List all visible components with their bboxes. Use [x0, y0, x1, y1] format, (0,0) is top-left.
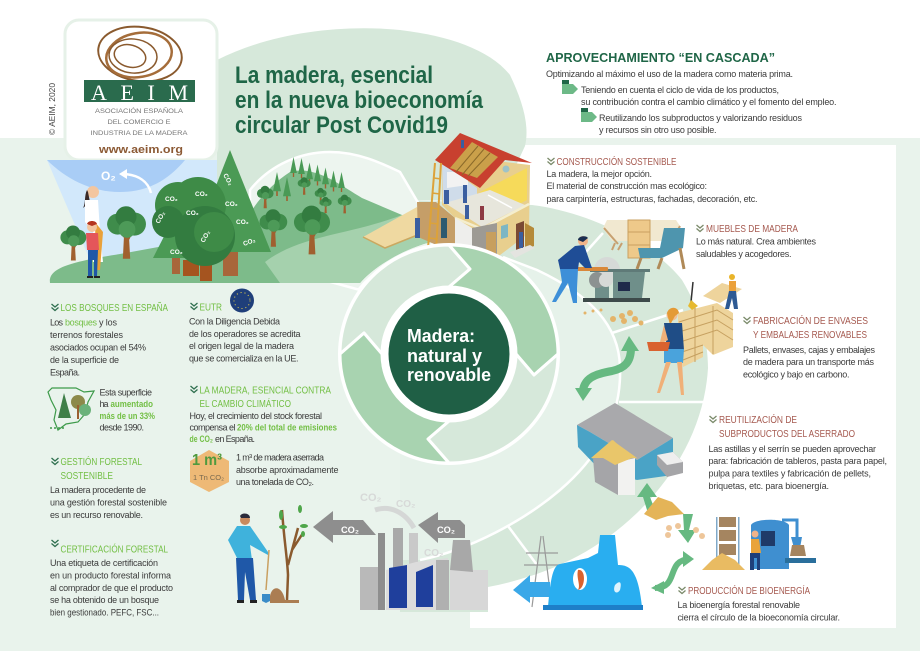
oxygen arrow	[124, 174, 151, 193]
block: certificación forestal: Una etiqueta de certificación	[50, 558, 158, 568]
saw machine	[590, 269, 650, 272]
logo: association name: ASOCIACIÓN ESPAÑOLA	[95, 106, 184, 115]
scene: forest absorbing CO2	[152, 150, 271, 281]
pallet truck	[691, 282, 693, 302]
icon: cascade arrow 2	[581, 108, 597, 122]
block: construcción sostenible: para carpintería, estructuras, fachadas, decoración, etc.	[546, 194, 758, 204]
title: circular Post Covid19	[235, 112, 448, 139]
facade window and door	[501, 224, 508, 239]
annex wall	[417, 202, 455, 253]
yellow wall	[480, 168, 527, 218]
heading: cascada: APROVECHAMIENTO “EN CASCADA”	[546, 50, 775, 65]
text: 1 m3 absorbs: una tonelada de CO₂.	[236, 477, 314, 487]
scene: hills	[50, 152, 440, 290]
illustration: bioenergy plant	[513, 535, 643, 610]
block: cambio climático: compensa el	[190, 422, 236, 432]
ladder	[428, 163, 441, 252]
block: los bosques en España: y los	[99, 318, 118, 328]
illustration: chipping mill	[577, 403, 683, 495]
arrow: CO2 right: CO₂	[437, 525, 455, 536]
oxygen label: O₂	[101, 169, 116, 183]
illustration: factory	[360, 492, 488, 610]
upper room back wall	[442, 163, 477, 207]
block: certificación forestal: CERTIFICACIÓN FORESTAL	[60, 542, 168, 556]
CO2 labels on trees: CO₂	[170, 249, 183, 256]
arrow: bioenergy exchange	[651, 551, 694, 594]
block: gestión forestal sostenible: GESTIÓN FORESTAL	[60, 455, 142, 468]
block: aprovechamiento en cascada	[546, 50, 836, 135]
block: los bosques en España: de la superficie de	[50, 355, 119, 365]
workers	[415, 218, 420, 238]
crate	[647, 342, 670, 351]
worker	[578, 236, 588, 246]
block: producción de bioenergía: cierra el círculo de la bioeconomía circular.	[678, 612, 840, 622]
illustration: pallets and woman	[647, 274, 742, 395]
wood chip pile	[644, 497, 684, 520]
segment: left	[340, 333, 449, 463]
icon: 1 m3 wood cube	[190, 450, 229, 492]
block: reutilización de subproductos: para: fabricación de tableros, pasta para papel,	[708, 456, 887, 466]
CO2 labels on trees: CO₂	[155, 210, 167, 225]
text: esta superficie	[100, 388, 155, 432]
CO2 labels on trees: CO₂	[221, 172, 234, 187]
logo: association name: DEL COMERCIO E	[108, 119, 171, 126]
illustration: biomass factory	[702, 517, 816, 570]
illustration: sawmill worker	[552, 236, 650, 326]
scene: trees beside family	[60, 206, 146, 260]
block: cambio climático: EL CAMBIO CLIMÁTICO	[200, 397, 291, 410]
block: cambio climático: en España.	[215, 434, 255, 444]
arrow: chips up to mill and down to bioenergy	[637, 483, 705, 543]
block: los bosques en España	[50, 301, 168, 378]
logo panel	[65, 20, 217, 160]
block: envases y embalajes	[743, 314, 876, 380]
family figures	[83, 186, 103, 278]
block: los bosques en España: España.	[50, 368, 80, 378]
illustration: man planting tree	[228, 505, 308, 603]
logo: association name: INDUSTRIA DE LA MADERA	[90, 130, 188, 137]
panel: white right panel	[470, 145, 896, 628]
block: certificación forestal: al comprador de que el producto	[50, 583, 173, 593]
block: los bosques en España: terrenos forestales	[50, 330, 124, 340]
scene: pines and small trees on hill	[257, 157, 352, 254]
blue tanks	[548, 535, 642, 607]
man	[240, 515, 250, 525]
text: 1 m3 absorbs	[236, 452, 338, 487]
floor edge	[455, 204, 529, 229]
CO2 labels on trees: CO₂	[225, 201, 238, 208]
red roof	[435, 133, 532, 188]
lower rooms	[455, 218, 472, 255]
block: aprovechamiento en cascada: Optimizando al máximo el uso de la madera como materia prima.	[546, 69, 793, 79]
text: 1 m3 absorbs: absorbe aproximadamente	[236, 465, 338, 475]
block: reutilización de subproductos: pulpa para textiles y fabricación de pellets,	[708, 468, 871, 478]
arrow: S-curve from mill to packaging	[575, 336, 639, 401]
block: cambio climático: LA MADERA, ESENCIAL CONTRA	[200, 386, 331, 396]
CO2 labels on trees: CO₂	[236, 219, 249, 226]
floor	[445, 190, 525, 227]
outer ring: circular economy stages	[400, 200, 708, 612]
block: certificación forestal: se ha obtenido de un bosque	[50, 595, 159, 605]
central circular arrows	[338, 243, 560, 465]
block: gestión forestal sostenible: La madera procedente de	[50, 485, 146, 495]
block: muebles de madera: Lo más natural. Crea ambientes	[696, 236, 816, 246]
pylon	[524, 536, 560, 607]
text: esta superficie: ha	[100, 399, 108, 409]
title: La madera, esencial	[235, 62, 433, 89]
block: reutilización de subproductos: Las astillas y el serrín se pueden aprovechar	[708, 444, 876, 454]
block: certificación forestal	[50, 540, 173, 618]
icon: cascade arrow 1	[562, 80, 578, 94]
block: cambio climático: Hoy, el crecimiento del stock forestal	[190, 411, 322, 421]
arrow: CO2 right	[418, 512, 465, 543]
block: envases y embalajes: de madera para un transporte más	[743, 357, 874, 367]
central circle: Madera natural y renovable: Madera:	[407, 326, 475, 346]
icon: 1 m3 wood cube: 1 m³	[192, 452, 222, 469]
block: producción de bioenergía	[678, 584, 840, 622]
segment: top left	[340, 245, 470, 354]
block: reutilización de subproductos: REUTILIZACIÓN DE	[719, 413, 797, 426]
energy arrow	[513, 575, 550, 603]
pallets	[678, 303, 733, 367]
illustration: factory: CO₂	[396, 499, 415, 510]
block: construcción sostenible: La madera, la mejor opción.	[546, 169, 652, 179]
block: aprovechamiento en cascada: su contribución contra el cambio climático y el fomento del empleo.	[581, 97, 836, 107]
block: envases y embalajes: ecológico y bajo en carbono.	[743, 370, 850, 380]
block: EUTR: el origen legal de la madera	[189, 341, 294, 351]
house illustration	[363, 133, 535, 268]
block: gestión forestal sostenible: una gestión forestal sostenible	[50, 498, 167, 508]
block: construcción sostenible	[546, 155, 758, 204]
block: aprovechamiento en cascada: Teniendo en cuenta el ciclo de vida de los productos,	[581, 85, 779, 95]
block: EUTR: EUTR	[200, 302, 222, 314]
round tree	[155, 182, 201, 228]
text: esta superficie: Esta superficie	[100, 388, 152, 398]
block: reutilización de subproductos	[708, 413, 887, 491]
shovel	[266, 550, 269, 590]
block: reutilización de subproductos: SUBPRODUCTOS DEL ASERRADO	[719, 429, 855, 440]
block: envases y embalajes: Pallets, envases, cajas y embalajes	[743, 345, 876, 355]
block: cambio climático	[190, 386, 337, 444]
main walls	[442, 162, 530, 268]
page background	[0, 138, 920, 651]
CO2 labels on trees: CO₂	[165, 196, 178, 203]
illustration: factory: CO₂	[360, 492, 382, 504]
block: certificación forestal: en un producto forestal informa	[50, 570, 171, 580]
CO2 labels on trees: CO₂	[242, 237, 257, 248]
logo: AEIM bar: AEIM	[91, 80, 188, 105]
block: EUTR	[189, 288, 300, 364]
block: EUTR: Con la Diligencia Debida	[189, 316, 280, 326]
segment: top right	[449, 245, 558, 375]
top pale green hill	[217, 28, 527, 200]
segment: bottom right	[428, 354, 558, 463]
title: en la nueva bioeconomía	[235, 87, 484, 114]
central circle: Madera natural y renovable: natural y	[407, 346, 482, 366]
lumber	[363, 207, 425, 248]
block: cambio climático: de CO₂	[190, 434, 213, 444]
icon: 1 m3 wood cube: 1 Tn CO₂	[193, 473, 224, 482]
arrow: CO2 left: CO₂	[341, 525, 359, 536]
CO2 labels on trees: CO₂	[195, 191, 208, 198]
text: esta superficie: aumentado	[110, 399, 153, 409]
logo: website: www.aeim.org	[98, 144, 183, 156]
operator	[752, 530, 758, 538]
block: aprovechamiento en cascada: Reutilizando los subproductos y valorizando residuos	[599, 113, 802, 123]
icon: EU flag circle	[230, 288, 254, 312]
top pallets and worker	[703, 283, 742, 303]
logo: wood rings	[95, 21, 185, 87]
block: producción de bioenergía: La bioenergía forestal renovable	[678, 600, 800, 610]
central circle: Madera natural y renovable: renovable	[407, 365, 491, 385]
block: producción de bioenergía: PRODUCCIÓN DE BIOENERGÍA	[688, 584, 810, 597]
block: aprovechamiento en cascada: y recursos sin otro uso posible.	[599, 125, 716, 135]
block: construcción sostenible: El material de construcción mas ecológico:	[546, 181, 707, 191]
block: construcción sostenible: CONSTRUCCIÓN SOSTENIBLE	[556, 155, 677, 168]
conifer right	[190, 150, 271, 252]
block: gestión forestal sostenible: SOSTENIBLE	[60, 471, 113, 482]
central circle: Madera natural y renovable	[387, 292, 511, 416]
text: esta superficie: más de un 33%	[100, 411, 155, 421]
conveyor	[785, 558, 816, 563]
block: muebles de madera: MUEBLES DE MADERA	[706, 224, 798, 235]
conifer left	[153, 205, 210, 258]
wood plank	[562, 267, 608, 271]
machine	[751, 520, 789, 569]
text: esta superficie: desde 1990.	[100, 422, 144, 432]
block: los bosques en España: bosques	[65, 318, 98, 328]
block: certificación forestal: bien gestionado. PEFC, FSC...	[50, 608, 159, 618]
icon: Spain map with trees	[48, 388, 94, 430]
woman	[666, 310, 678, 320]
block: gestión forestal sostenible: es un recurso renovable.	[50, 510, 143, 520]
block: los bosques en España: asociados ocupan el 54%	[50, 342, 146, 352]
block: los bosques en España: LOS BOSQUES EN ESPAÑA	[60, 301, 168, 314]
arrow: CO2 left	[313, 511, 376, 543]
shelf with boxes	[716, 517, 718, 567]
block: muebles de madera	[696, 224, 816, 259]
block: EUTR: de los operadores se acredita	[189, 329, 300, 339]
block: reutilización de subproductos: briquetas, etc. para bioenergía.	[708, 481, 829, 491]
illustration: factory: CO₂	[424, 548, 443, 559]
scene: sky and oxygen	[47, 160, 217, 260]
block: envases y embalajes: FABRICACIÓN DE ENVASES	[753, 314, 868, 327]
CO2 labels on trees	[155, 172, 257, 256]
CO2 labels on trees: CO₂	[186, 210, 199, 217]
copyright: © AEIM, 2020	[48, 82, 57, 135]
wood chips	[584, 308, 644, 326]
chip piles	[702, 553, 745, 570]
block: cambio climático: 20% del total de emisiones	[237, 422, 337, 432]
title	[235, 62, 484, 139]
block: gestión forestal sostenible	[50, 455, 167, 520]
block: los bosques en España: Los	[50, 318, 64, 328]
block: muebles de madera: saludables y acogedores.	[696, 249, 792, 259]
CO2 labels on trees: CO₂	[200, 229, 212, 244]
block: EUTR: que se comercializa en la UE.	[189, 354, 298, 364]
block: envases y embalajes: Y EMBALAJES RENOVABLES	[753, 330, 867, 341]
text: 1 m3 absorbs: 1 m³ de madera aserrada	[236, 452, 324, 462]
saw blade	[594, 257, 620, 283]
sapling	[282, 510, 303, 600]
logo: association name	[90, 106, 188, 137]
illustration: furniture	[603, 220, 685, 269]
